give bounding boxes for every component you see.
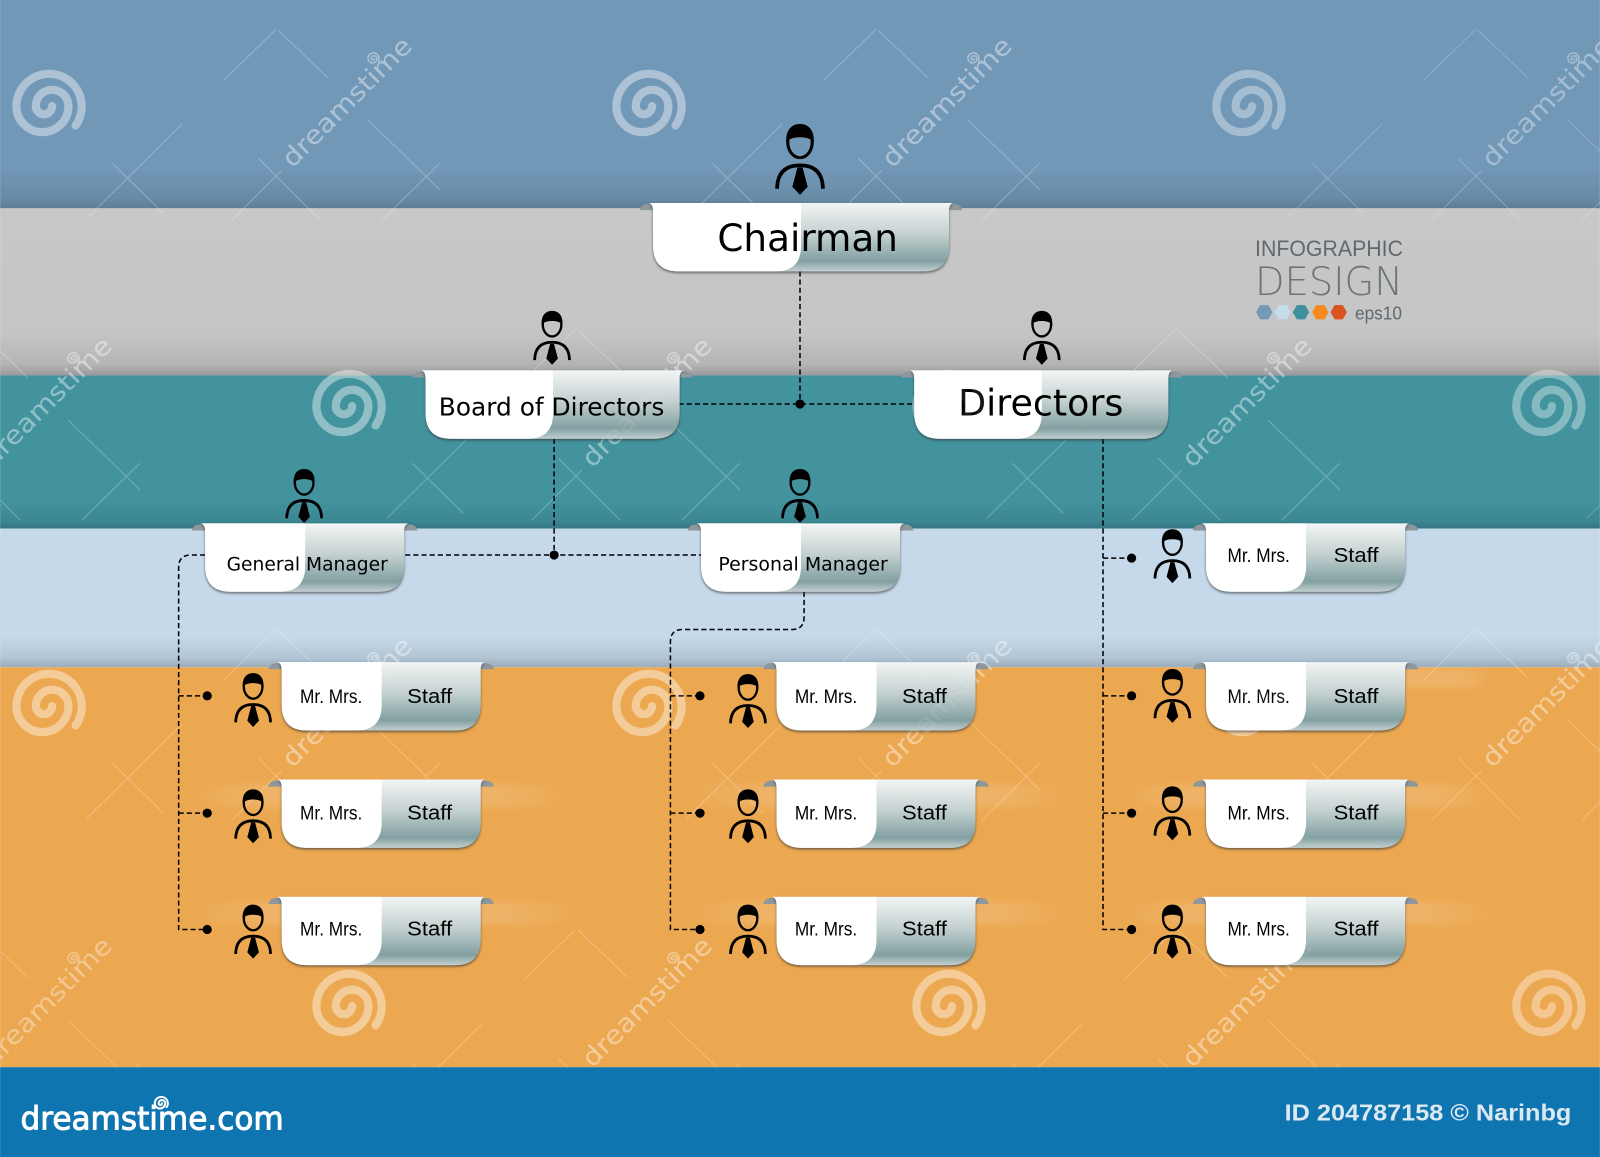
card: staff column 2 row 2: Staff	[902, 802, 947, 824]
card: staff column 3 row 1: Mr. Mrs.	[1227, 545, 1290, 567]
logo: infographic design eps10: DESIGN	[1255, 260, 1403, 305]
orange row highlights	[189, 669, 1500, 924]
icon: staff column 2 row 3	[731, 905, 765, 959]
card: staff column 2 row 1: Mr. Mrs.	[795, 686, 857, 708]
card: Chairman: Chairman	[717, 216, 898, 260]
band: blue top	[0, 0, 1600, 209]
card: staff column 1 row 1: Staff	[407, 686, 453, 708]
icon: directors	[1024, 311, 1059, 365]
icon: staff column 1 row 3	[236, 905, 271, 959]
card: staff column 1 row 2: Staff	[407, 802, 453, 824]
icon: board of directors	[535, 311, 570, 365]
card: staff column 1 row 2: Mr. Mrs.	[300, 802, 362, 824]
card: staff column 3 row 3: Mr. Mrs.	[1227, 802, 1290, 824]
logo: infographic design eps10	[1255, 236, 1403, 323]
faint watermark overlay across cards	[0, 343, 1592, 1065]
card: Personal Manager: Personal Manager	[718, 554, 888, 575]
card: Directors: Directors	[958, 381, 1123, 424]
card: staff column 3 row 3	[1193, 779, 1418, 848]
card: staff column 1 row 1	[268, 662, 494, 731]
card: staff column 3 row 1	[1193, 523, 1418, 592]
icon: staff column 2 row 2	[731, 789, 765, 843]
card: Personal Manager	[688, 523, 913, 592]
band: grey	[0, 208, 1600, 375]
card: staff column 3 row 2: Staff	[1334, 686, 1379, 708]
icon: general manager	[287, 469, 322, 523]
card: staff column 2 row 3: Mr. Mrs.	[795, 919, 857, 941]
connector nodes	[203, 399, 1136, 934]
card: staff column 3 row 4: Staff	[1334, 919, 1379, 941]
card: staff column 1 row 3: Staff	[407, 919, 453, 941]
card: staff column 3 row 3: Staff	[1334, 802, 1379, 824]
card: Board of Directors	[412, 370, 693, 439]
band: orange	[0, 667, 1600, 1067]
card: staff column 2 row 2: Mr. Mrs.	[795, 802, 857, 824]
card: Chairman	[640, 203, 962, 271]
card: staff column 1 row 3	[268, 897, 494, 965]
card: staff column 2 row 3	[763, 897, 989, 965]
footer bar	[0, 1067, 1600, 1157]
icon: staff column 1 row 2	[236, 789, 271, 843]
card: staff column 2 row 3: Staff	[902, 919, 947, 941]
card: staff column 1 row 2	[268, 779, 494, 848]
card: Directors	[901, 370, 1182, 439]
footer logo: dreamstime.com: dreamstime.com	[21, 1101, 284, 1137]
footer image id and author: ID 204787158 © Narinbg	[1285, 1099, 1571, 1125]
icon: personal manager	[783, 469, 817, 523]
card: staff column 3 row 4	[1193, 897, 1418, 965]
card: General Manager: General Manager	[227, 554, 388, 575]
card: staff column 3 row 1: Staff	[1334, 545, 1379, 567]
card: staff column 3 row 4: Mr. Mrs.	[1227, 919, 1290, 941]
icon: staff column 3 row 1	[1155, 529, 1190, 583]
card: General Manager	[192, 523, 417, 592]
logo: infographic design eps10: eps10	[1355, 302, 1402, 323]
card: Board of Directors: Board of Directors	[439, 392, 664, 421]
card: staff column 3 row 2	[1193, 662, 1418, 731]
card: staff column 1 row 1: Mr. Mrs.	[300, 686, 362, 708]
card: staff column 1 row 3: Mr. Mrs.	[300, 919, 362, 941]
card: staff column 2 row 2	[763, 779, 989, 848]
card: staff column 2 row 1	[763, 662, 989, 731]
band: teal	[0, 375, 1600, 529]
icon: staff column 3 row 4	[1155, 905, 1190, 959]
icon: chairman	[777, 124, 823, 195]
icon: staff column 3 row 3	[1155, 786, 1190, 840]
connector lines	[179, 271, 1132, 929]
card: staff column 3 row 2: Mr. Mrs.	[1227, 686, 1290, 708]
icon: staff column 2 row 1	[731, 674, 765, 728]
icon: staff column 3 row 2	[1155, 669, 1190, 723]
band: light blue	[0, 529, 1600, 667]
icon: staff column 1 row 1	[236, 673, 271, 727]
logo: infographic design eps10: INFOGRAPHIC	[1255, 236, 1403, 261]
card: staff column 2 row 1: Staff	[902, 686, 947, 708]
